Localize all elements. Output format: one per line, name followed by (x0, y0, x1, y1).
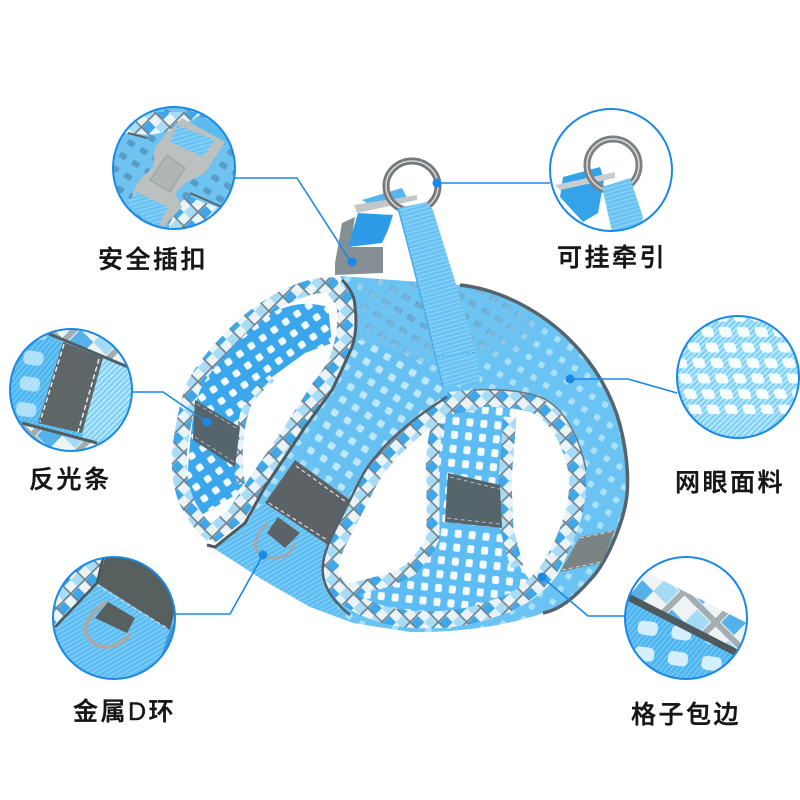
metal ring (386, 161, 438, 211)
center mesh strip (350, 400, 532, 622)
plaid knot (447, 390, 478, 414)
label: leash ring: 可挂牵引 (557, 244, 667, 272)
dark back edge trim (460, 285, 628, 613)
leader: mesh fabric (566, 374, 677, 393)
front chest mesh (300, 340, 443, 498)
detail circle: leash ring (550, 108, 674, 232)
center strip plaid edging (350, 417, 517, 590)
metal D ring (255, 517, 300, 558)
left reflective patch (193, 400, 240, 467)
neck dark trim (207, 280, 356, 547)
right loop dark trim (323, 397, 447, 615)
front reflective patch (265, 460, 350, 545)
harness product illustration (179, 161, 628, 632)
left loop plaid edging (179, 285, 338, 535)
leader: D ring (175, 550, 268, 614)
label: mesh fabric: 网眼面料 (675, 469, 785, 497)
detail circle: plaid edging (620, 556, 748, 685)
detail circle: reflective strip (9, 328, 133, 452)
back strap (398, 202, 480, 387)
callout lines (132, 178, 677, 616)
label: safety buckle: 安全插扣 (98, 246, 208, 274)
right loop plaid edging (330, 398, 578, 620)
label: plaid edging: 格子包边 (631, 701, 741, 729)
darker upper mesh shading (355, 278, 544, 366)
label: reflective strip: 反光条 (29, 466, 112, 494)
leader: leash ring (432, 178, 550, 188)
right loop opening (323, 391, 586, 628)
detail circle: safety buckle (110, 105, 240, 235)
leader: plaid edging (538, 572, 625, 616)
leader: safety buckle (235, 178, 356, 266)
left inner mesh band (188, 304, 332, 517)
left loop inner plaid (239, 378, 272, 484)
top trim of right loop (473, 390, 586, 470)
mesh body (213, 276, 628, 632)
center reflective patch (445, 473, 502, 528)
label: metal D ring: 金属D环 (73, 698, 176, 726)
lower twill body (215, 500, 345, 617)
neck plaid edging (208, 288, 346, 537)
detail circle: mesh fabric (675, 314, 800, 440)
right side reflective patch (560, 530, 615, 572)
detail circle: metal D ring (50, 555, 178, 683)
buckle and collar strap (335, 188, 417, 275)
leader: reflective strip (132, 392, 212, 426)
